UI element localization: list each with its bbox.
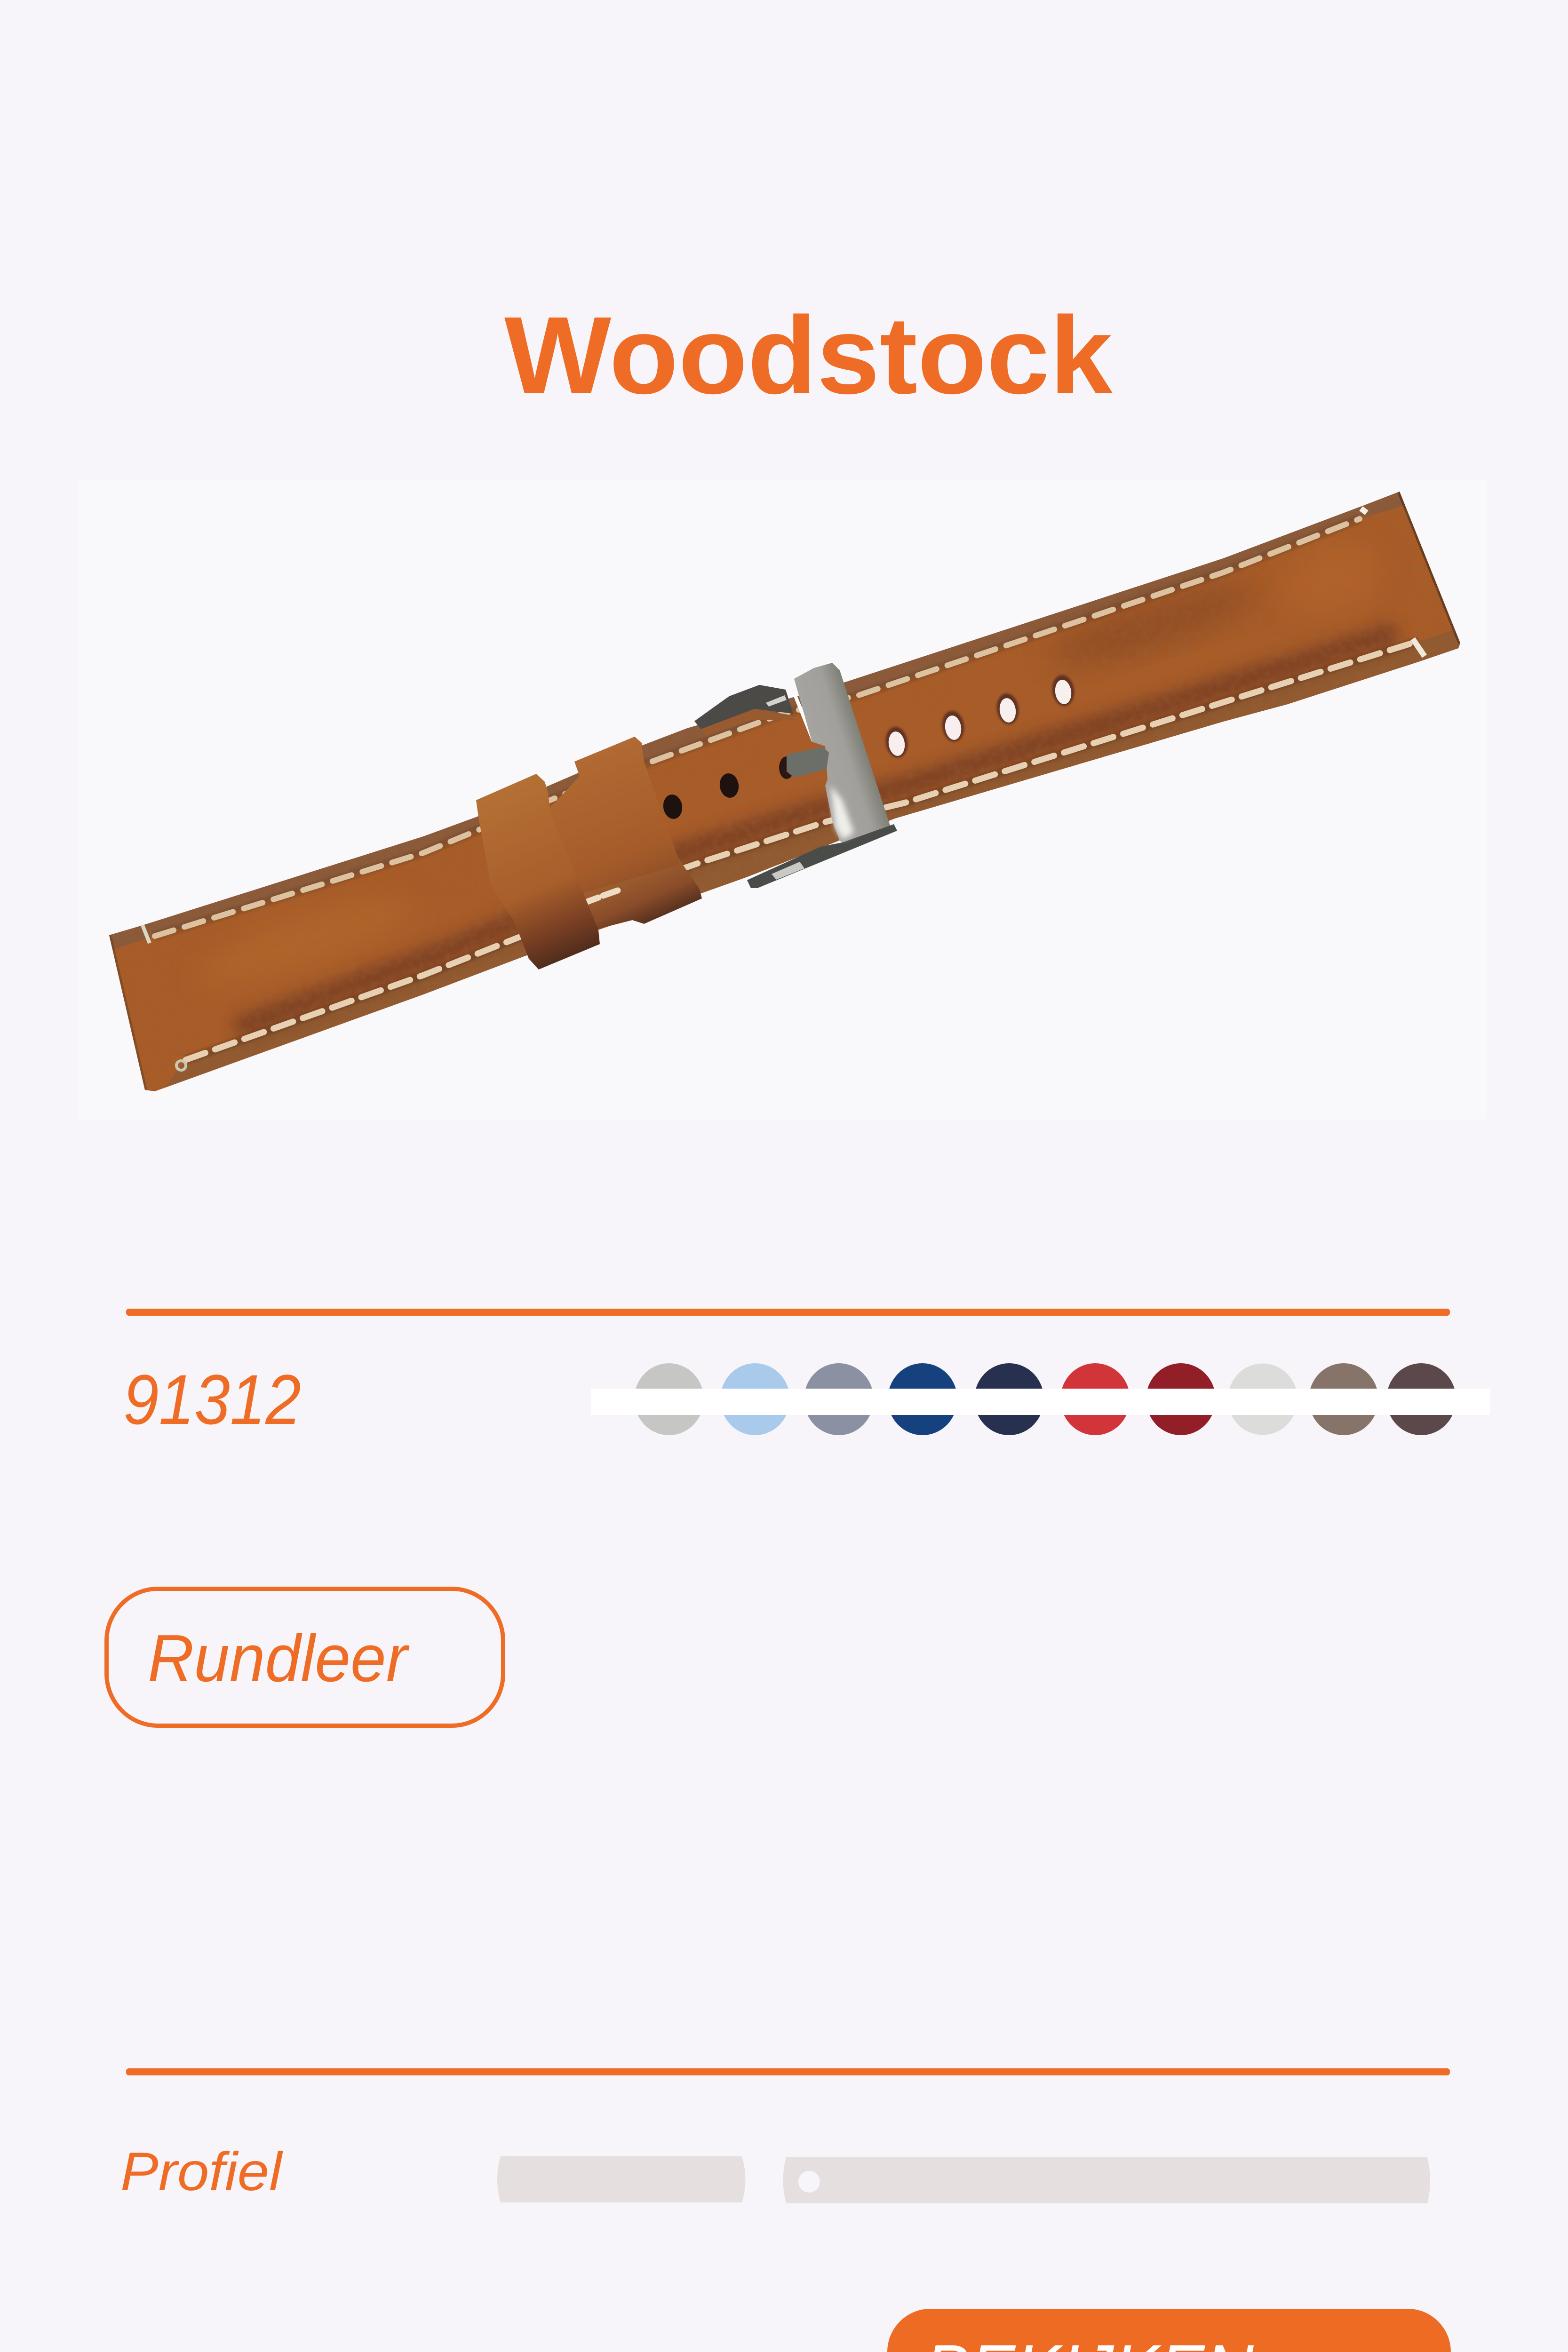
material tag — [106, 1589, 503, 1725]
first keeper — [476, 774, 600, 969]
top divider — [126, 1309, 1450, 1316]
stitching — [143, 509, 1425, 1070]
buckle back bar — [694, 685, 793, 729]
buckle gap — [793, 695, 815, 742]
buckle lower bar — [747, 824, 897, 888]
bottom divider — [126, 2068, 1450, 2075]
product photo: leather watch strap — [109, 492, 1460, 1091]
profile shape: long strap part — [783, 2157, 1430, 2203]
article number: 91312 — [123, 1360, 301, 1439]
button: bekijken — [887, 2309, 1451, 2352]
second keeper — [546, 737, 680, 894]
profile label: Profiel — [120, 2142, 284, 2202]
material tag: Rundleer — [148, 1621, 410, 1696]
title: Woodstock — [504, 294, 1113, 417]
buckle plate — [794, 663, 890, 842]
strap keeper loops — [476, 737, 702, 969]
buckle tongue — [787, 747, 829, 778]
strap body — [94, 480, 1472, 1101]
photo backdrop — [78, 480, 1487, 1120]
colour swatches — [591, 1363, 1490, 1435]
strap holes — [662, 674, 1076, 820]
white band across swatches — [591, 1389, 1490, 1415]
buckle — [694, 663, 897, 888]
tail under second keeper — [574, 858, 702, 929]
strap in back bar — [701, 709, 795, 736]
profile shape: short strap part — [497, 2156, 745, 2202]
